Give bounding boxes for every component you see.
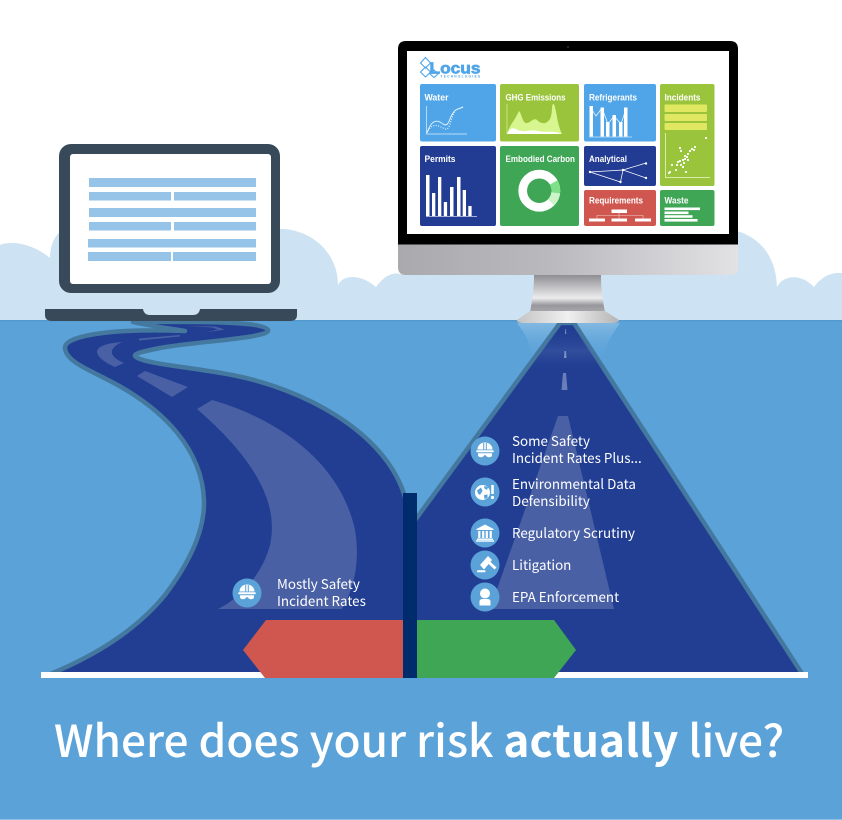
horizon line [0,320,842,322]
large lane marking [197,400,357,609]
small lane marking [564,351,566,358]
label: Incident Rates [277,590,366,610]
large lane marking [490,416,614,609]
winding road markings [97,326,357,609]
tile: Permits: Permits [424,154,456,164]
tile: Refrigerants [584,84,656,142]
tile: Embodied Carbon [500,146,579,226]
monitor camera [567,46,569,48]
label: Incident Rates Plus... [512,447,642,467]
laptop screen [70,154,271,284]
far lane markings [139,326,225,340]
label: Mostly Safety [277,573,360,593]
item: EPA Enforcement [470,582,619,612]
icon: bank building [470,518,500,548]
road glow [528,330,606,372]
icon: gavel [470,550,500,580]
divider pole [403,493,417,678]
tile: Analytical: Analytical [589,154,627,164]
item: Some Safety Incident Rates Plus [470,430,642,467]
desktop monitor [398,41,738,323]
icon: hard hat [232,578,262,608]
mid lane marking [562,373,568,390]
label: EPA Enforcement [512,586,619,606]
red arrow [243,620,403,678]
tiny lane marking [565,329,566,334]
item: Regulatory Scrutiny [470,518,635,548]
tile: GHG Emissions: GHG Emissions [506,92,566,102]
small lane marking [97,342,124,367]
laptop screen frame [59,144,280,293]
middle lane marking [137,371,188,397]
title: Where does your risk actually live? [54,706,784,770]
monitor screen [407,51,729,234]
white ground line [41,672,808,678]
laptop [45,144,297,321]
road: winding safety path [48,322,410,675]
tile: GHG Emissions [500,84,579,142]
item: Environmental Data Defensibility [470,473,636,510]
label: Regulatory Scrutiny [512,522,635,542]
clouds [0,229,842,322]
tile: Analytical [584,146,656,186]
tile: Waste [660,190,714,226]
icon: hard hat [470,436,500,466]
bottom edge [0,819,842,820]
tile: Refrigerants: Refrigerants [589,92,637,102]
logo diamonds [420,58,438,78]
label: Some Safety [512,430,590,450]
icon: officer [470,582,500,612]
laptop base [45,309,297,321]
logo tagline: TECHNOLOGIES [440,74,480,78]
monitor stand [530,275,605,312]
tile: Water [420,84,496,142]
label: Environmental Data [512,473,636,493]
item: Litigation [470,550,571,580]
label: Litigation [512,554,571,574]
tile: Permits [420,146,496,226]
tile: Embodied Carbon: Embodied Carbon [506,154,575,164]
monitor foot [517,311,619,323]
icon: globe with exclamation [470,478,500,506]
tile: Incidents: Incidents [664,92,701,102]
tile: Requirements: Requirements [589,196,643,206]
water background [0,320,842,820]
sky background [0,0,842,321]
tile: Water: Water [424,92,449,102]
tile: Waste: Waste [664,196,689,206]
logo wordmark: Locus [430,60,481,78]
green arrow [417,620,576,678]
road: straight regulated path [410,323,803,675]
tile: Incidents [660,84,714,186]
monitor chin [398,240,738,275]
tile: Requirements [584,190,656,226]
item: Mostly Safety Incident Rates [232,573,366,610]
monitor bezel [398,41,738,244]
straight road markings [490,329,614,609]
monitor reflection glow [517,323,620,362]
label: Defensibility [512,490,590,510]
logo: Locus Technologies [420,58,481,78]
laptop data rows [88,178,256,261]
